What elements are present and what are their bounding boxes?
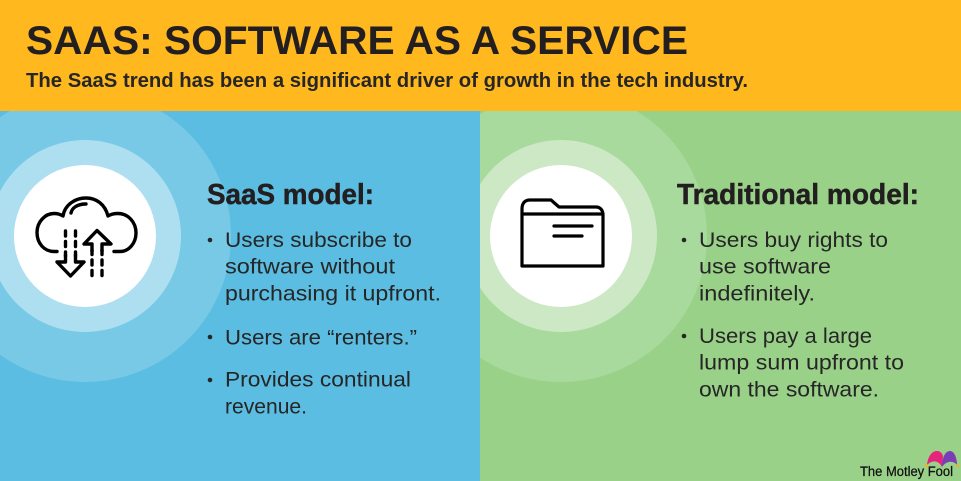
subtitle: The SaaS trend has been a significant driver of growth in the tech industry. <box>26 69 748 92</box>
bullet: subscribe: purchasing it upfront. <box>225 282 441 306</box>
icon: cloud with up and down arrows <box>37 198 136 276</box>
bullet: buy rights: indefinitely. <box>699 282 815 306</box>
heading: SaaS model: SaaS model: <box>207 179 374 211</box>
bullet list: SaaS model <box>208 229 441 418</box>
icon: jester hat <box>925 451 959 467</box>
bullet: lump sum: lump sum upfront to <box>699 352 904 374</box>
icon backdrop: concentric circles, green <box>480 111 707 382</box>
bullet: continual revenue <box>208 368 411 418</box>
icon backdrop: concentric circles, blue <box>0 90 231 382</box>
panel: SaaS model <box>0 111 439 414</box>
title: SAAS: SOFTWARE AS A SERVICE <box>26 19 688 63</box>
bullet: subscribe <box>208 229 441 306</box>
bullet: buy rights: use software <box>699 256 831 278</box>
bullet: lump sum: Users pay a large <box>699 325 872 348</box>
bullet: continual revenue: Provides continual <box>225 368 411 392</box>
bullet: buy rights <box>682 229 888 306</box>
bullet: renters: Users are “renters.” <box>225 326 417 350</box>
bullet: continual revenue: revenue. <box>225 396 307 418</box>
bullet: lump sum <box>682 325 904 402</box>
heading: Traditional model: Traditional model: <box>677 179 919 211</box>
bullet: buy rights: Users buy rights to <box>699 229 888 252</box>
header banner <box>0 0 961 111</box>
bullet list: Traditional model <box>682 229 904 402</box>
logo: The Motley Fool <box>860 451 959 479</box>
icon: folder <box>522 200 603 266</box>
wordmark: The Motley Fool <box>860 464 953 479</box>
bullet: subscribe: Users subscribe to <box>225 229 412 252</box>
bullet: lump sum: own the software. <box>699 378 879 402</box>
panel: Traditional model <box>480 111 961 481</box>
bullet: subscribe: software without <box>225 256 395 278</box>
